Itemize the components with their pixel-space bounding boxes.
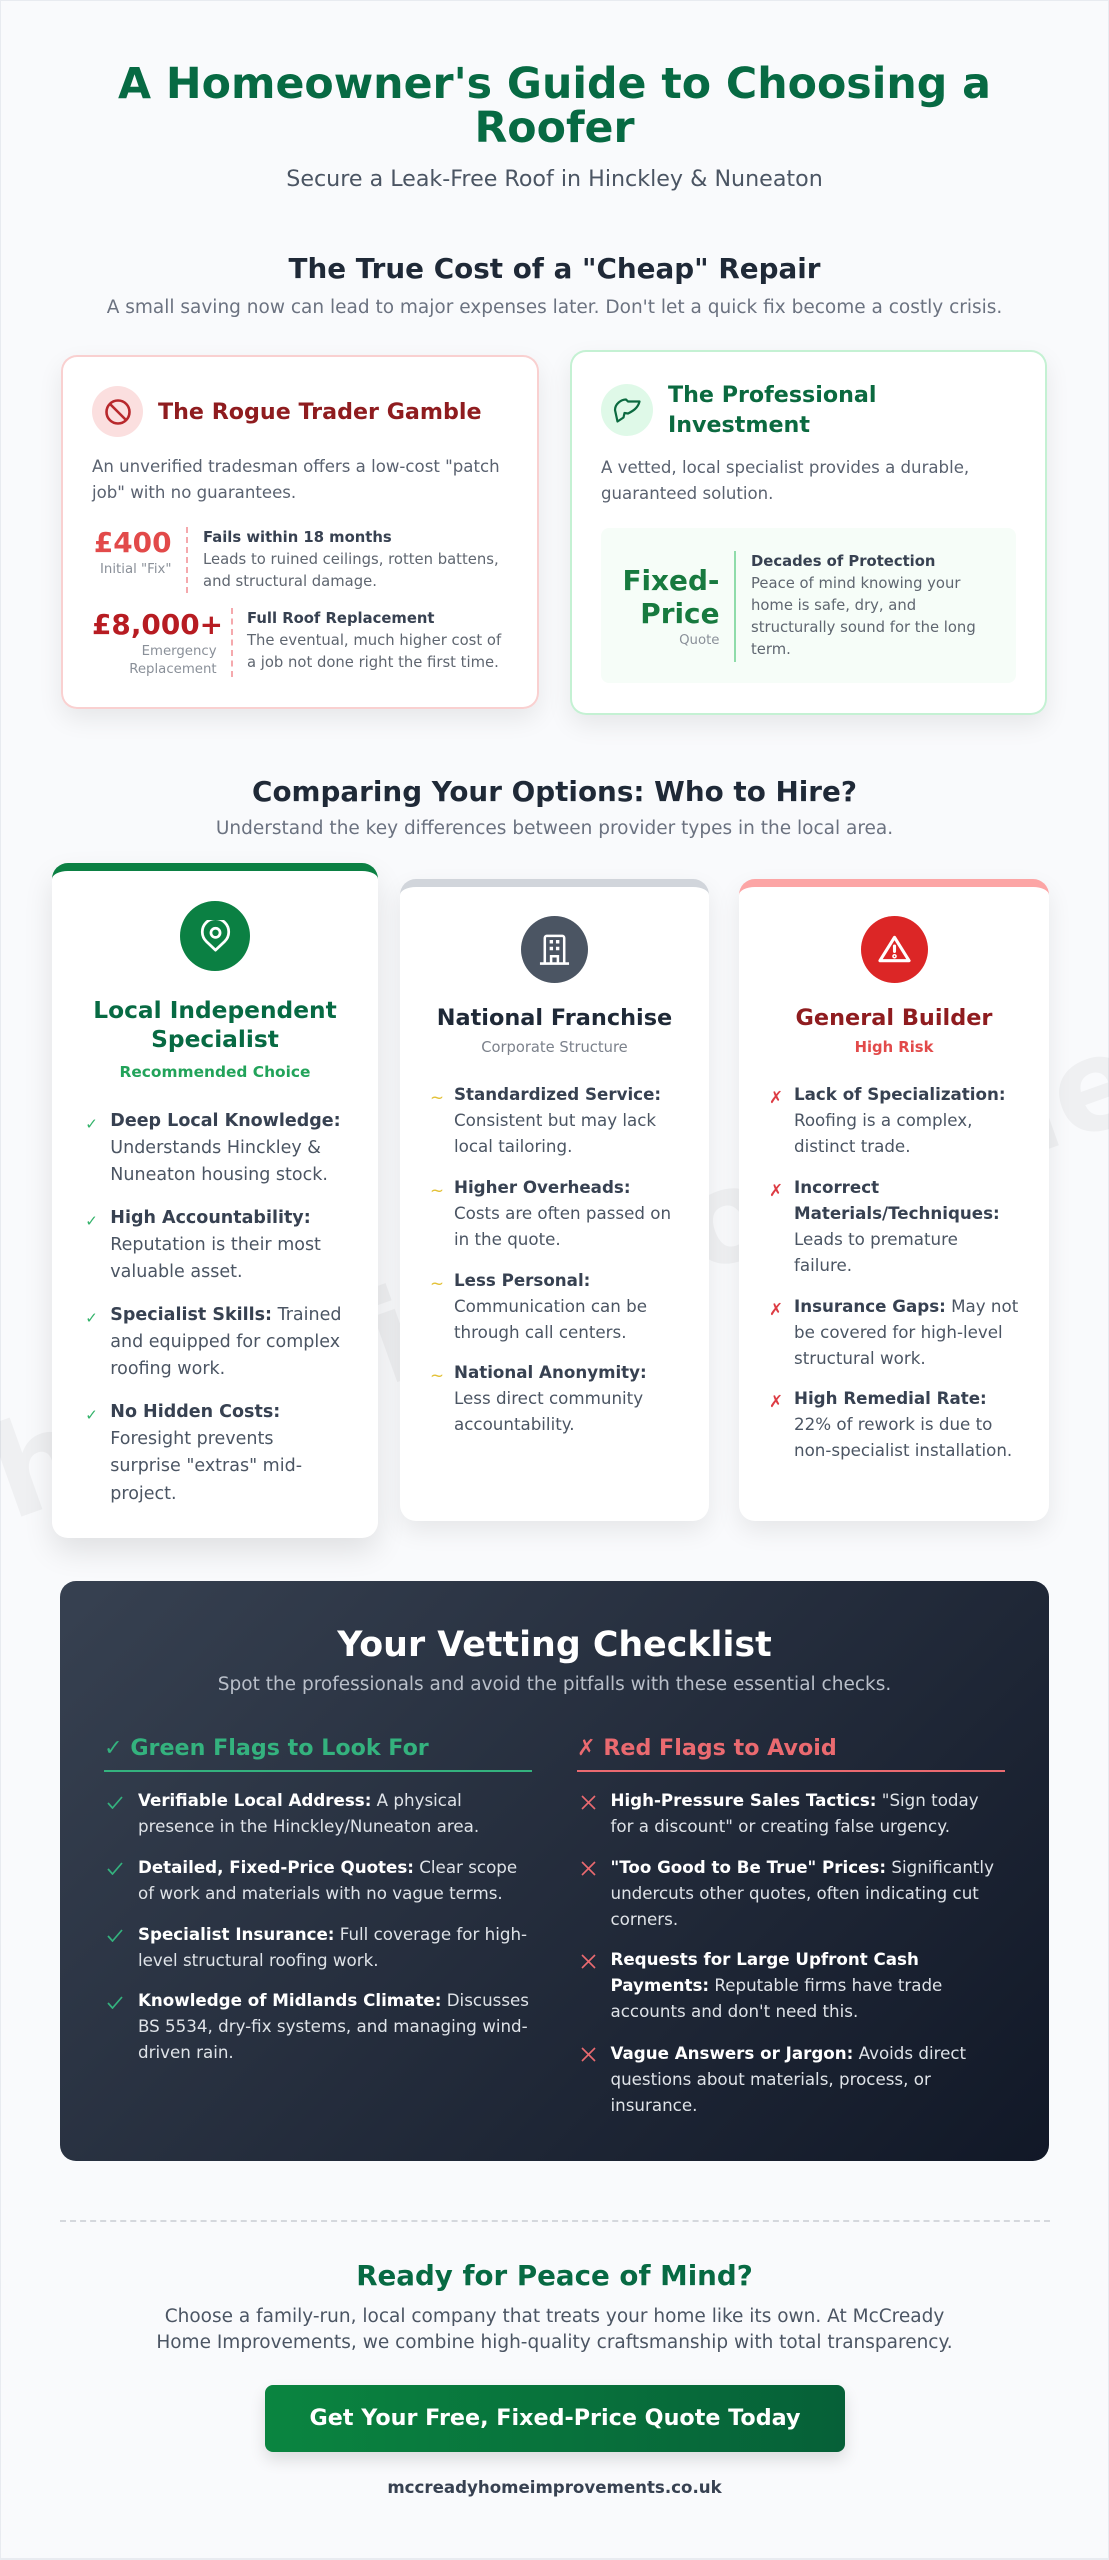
item: vague answers: Vague Answers or Jargon: Avoids direct (610, 2042, 966, 2062)
tag: recommended: Recommended Choice (120, 1062, 310, 1080)
item: specialist skills: Specialist Skills: Trained (110, 1305, 341, 1325)
item: insurance gaps: Insurance Gaps: May not (794, 1296, 1018, 1316)
item: specialist insurance: Specialist Insurance: Full coverage for high- (138, 1924, 527, 1944)
item: upfront cash: Requests for Large Upfront Cash (610, 1949, 919, 1969)
icon: warning (861, 916, 928, 982)
item: lack of specialization (769, 1084, 1006, 1156)
heading: local independent: Specialist (151, 1026, 279, 1052)
item: no hidden costs: surprise "extras" mid- (110, 1456, 302, 1476)
item: midlands climate: Knowledge of Midlands Climate: Discusses (138, 1990, 529, 2010)
heading: general builder: General Builder (796, 1005, 992, 1031)
item: verifiable address: Verifiable Local Address: A physical (138, 1790, 462, 1810)
item: upfront cash (582, 1949, 942, 2021)
panel: local independent: ✓ (85, 1212, 98, 1230)
title (118, 59, 991, 153)
item: no hidden costs: Foresight prevents (110, 1429, 274, 1449)
item: standardized service (430, 1084, 661, 1156)
item: midlands climate: driven rain. (138, 2042, 234, 2062)
underline: red flags (577, 1770, 1005, 1772)
item: less personal: through call centers. (454, 1322, 627, 1342)
explanation: decades: Peace of mind knowing your (751, 575, 960, 592)
item: too good prices: corners. (610, 1909, 678, 1929)
panel: local independent: ✓ (85, 1406, 98, 1424)
item: standardized service: Consistent but may lack (454, 1110, 656, 1130)
panel: national franchise: ~ (430, 1272, 444, 1292)
item: high accountability: valuable asset. (110, 1262, 243, 1282)
icon: leaf (601, 384, 653, 436)
item: higher overheads (430, 1177, 671, 1249)
item: less personal: Communication can be (454, 1296, 647, 1316)
stat label: emergency: Emergency (142, 644, 217, 658)
explanation: replacement: Full Roof Replacement (247, 610, 434, 627)
title: A Homeowner's Guide to Choosing a (118, 59, 991, 109)
item: national anonymity: Less direct community (454, 1388, 643, 1408)
item: incorrect materials: Incorrect (794, 1177, 879, 1197)
panel: national franchise (400, 879, 709, 1521)
item: high remedial rate: non-specialist installation. (794, 1440, 1012, 1460)
item: no hidden costs: project. (110, 1484, 177, 1504)
item: deep local knowledge: Deep Local Knowledge: (110, 1111, 341, 1131)
item: standardized service: Standardized Service: (454, 1084, 661, 1104)
item: lack of specialization: Lack of Specialization: (794, 1084, 1006, 1104)
call to action text: Choose a family-run, local company that treats your home like its own. At McCready (165, 2306, 944, 2327)
tag: high risk: High Risk (855, 1039, 933, 1056)
item: higher overheads: Higher Overheads: (454, 1177, 630, 1197)
explanation: decades (751, 553, 976, 658)
item: no hidden costs (85, 1402, 302, 1504)
explanation: replacement: a job not done right the first time. (247, 654, 499, 671)
stat: fixed price: Fixed- (622, 564, 720, 597)
button: Get Your Free, Fixed-Price Quote Today (310, 2405, 800, 2431)
stat label: initial fix: Initial "Fix" (100, 562, 172, 576)
explanation: decades: term. (751, 641, 791, 658)
item: specialist skills (85, 1305, 341, 1379)
heading: true cost: The True Cost of a "Cheap" Repair (288, 252, 820, 285)
item: higher overheads: in the quote. (454, 1229, 561, 1249)
description (601, 458, 969, 502)
item: high accountability: High Accountability: (110, 1208, 311, 1228)
item: incorrect materials: Leads to premature (794, 1229, 958, 1249)
item: high accountability: Reputation is their most (110, 1235, 321, 1255)
item: upfront cash: accounts and don't need this. (610, 2001, 858, 2021)
panel: general builder: ✗ (769, 1391, 783, 1411)
stat: fixed price: Price (640, 597, 720, 630)
underline: green flags (104, 1770, 532, 1772)
tag: corporate: Corporate Structure (481, 1039, 628, 1056)
item: standardized service: local tailoring. (454, 1136, 572, 1156)
item: upfront cash: Payments: Reputable firms have trade (610, 1975, 942, 1995)
item: vague answers: questions about materials, process, or (610, 2068, 931, 2088)
explanation: fails: and structural damage. (203, 573, 377, 590)
separator (734, 551, 736, 662)
description: An unverified tradesman offers a low-cost "patch (92, 456, 500, 476)
website: mccreadyhomeimprovements.co.uk (387, 2478, 722, 2496)
item: high pressure: for a discount" or creating false urgency. (610, 1816, 950, 1836)
panel: local independent: ✓ (85, 1309, 98, 1327)
item: high remedial rate: 22% of rework is due to (794, 1414, 992, 1434)
item: national anonymity (430, 1362, 647, 1434)
item: national anonymity: National Anonymity: (454, 1362, 647, 1382)
item: higher overheads: Costs are often passed on (454, 1203, 671, 1223)
item: verifiable address: presence in the Hinckley/Nuneaton area. (138, 1816, 479, 1836)
item: incorrect materials: failure. (794, 1255, 852, 1275)
item: less personal (430, 1270, 647, 1342)
heading: rogue trader: The Rogue Trader Gamble (158, 399, 482, 425)
stat label: emergency (129, 644, 217, 676)
separator (231, 608, 233, 677)
icon: pin (180, 901, 250, 971)
subtitle: Secure a Leak-Free Roof in Hinckley & Nuneaton (286, 166, 823, 192)
panel: general builder: ✗ (769, 1180, 783, 1200)
item: too good prices: undercuts other quotes, often indicating cut (610, 1883, 979, 1903)
explanation: replacement (246, 610, 502, 671)
description: A vetted, local specialist provides a durable, (601, 458, 969, 476)
description (92, 456, 500, 502)
item: incorrect materials (769, 1177, 1000, 1275)
description: job" with no guarantees. (92, 482, 296, 502)
icon: building (521, 916, 588, 982)
item: high pressure: High-Pressure Sales Tactics: "Sign today (610, 1790, 979, 1810)
panel: rogue trader (61, 355, 539, 709)
explanation: replacement: The eventual, much higher cost of (247, 632, 501, 649)
subheading: checklist: Spot the professionals and avoid the pitfalls with these essential checks. (218, 1674, 891, 1695)
item: specialist skills: roofing work. (110, 1359, 225, 1379)
heading: professional: Investment (668, 412, 810, 438)
item: specialist insurance (107, 1924, 527, 1970)
call to action text (156, 2306, 953, 2353)
panel: national franchise: ~ (430, 1180, 444, 1200)
heading: professional: The Professional (668, 382, 876, 408)
subheading: comparing: Understand the key differences between provider types in the local area. (216, 818, 893, 839)
heading: professional (668, 382, 876, 438)
item: no hidden costs: No Hidden Costs: (110, 1402, 280, 1422)
panel: vetting checklist (60, 1581, 1049, 2161)
call to action text: Home Improvements, we combine high-quality craftsmanship with total transparency. (156, 2332, 953, 2353)
heading: ready: Ready for Peace of Mind? (356, 2258, 753, 2292)
stat: 8000: £8,000+ (92, 608, 223, 641)
item: specialist skills: and equipped for complex (110, 1332, 340, 1352)
item: deep local knowledge: Understands Hinckley & (110, 1138, 321, 1158)
panel: national franchise: ~ (430, 1365, 444, 1385)
item: too good prices: "Too Good to Be True" Prices: Significantly (610, 1857, 994, 1877)
panel: professional investment (570, 350, 1047, 715)
item: lack of specialization: Roofing is a complex, (794, 1110, 972, 1130)
item: high remedial rate: High Remedial Rate: (794, 1388, 987, 1408)
item: insurance gaps: be covered for high-level (794, 1322, 1003, 1342)
item: vague answers: insurance. (610, 2094, 697, 2114)
stat label: emergency: Replacement (129, 662, 217, 676)
stat: 400: £400 (94, 526, 172, 559)
item: verifiable address (108, 1790, 479, 1836)
item: specialist insurance: level structural roofing work. (138, 1950, 379, 1970)
heading: green flags: ✓ Green Flags to Look For (104, 1735, 429, 1761)
button (265, 2385, 845, 2452)
explanation: decades: Decades of Protection (751, 553, 935, 570)
item: deep local knowledge (85, 1111, 341, 1185)
heading: national franchise: National Franchise (437, 1005, 672, 1031)
heading: comparing: Comparing Your Options: Who to Hire? (252, 775, 857, 808)
title: Roofer (474, 103, 635, 153)
item: lack of specialization: distinct trade. (794, 1136, 910, 1156)
heading: local independent: Local Independent (93, 996, 337, 1024)
item: insurance gaps: structural work. (794, 1348, 926, 1368)
stat: fixed price (622, 564, 720, 630)
explanation: decades: home is safe, dry, and (751, 597, 916, 614)
item: detailed quotes: Detailed, Fixed-Price Quotes: Clear scope (138, 1857, 517, 1877)
explanation: fails: Leads to ruined ceilings, rotten battens, (203, 551, 499, 568)
item: vague answers (582, 2042, 966, 2114)
item: less personal: Less Personal: (454, 1270, 590, 1290)
stat label: quote: Quote (679, 632, 720, 648)
panel: local independent (52, 863, 378, 1538)
explanation: fails (203, 529, 499, 590)
item: midlands climate (107, 1990, 529, 2062)
panel: national franchise: ~ (430, 1087, 444, 1107)
explanation: decades: structurally sound for the long (751, 619, 976, 636)
item: detailed quotes: of work and materials with no vague terms. (138, 1883, 503, 1903)
panel: general builder: ✗ (769, 1298, 783, 1318)
item: too good prices (582, 1857, 994, 1929)
item: high accountability (85, 1208, 321, 1282)
item: midlands climate: BS 5534, dry-fix systems, and managing wind- (138, 2016, 528, 2036)
subheading: true cost: A small saving now can lead to major expenses later. Don't let a quick fix become a costly crisis. (107, 297, 1002, 318)
heading: local independent (93, 996, 337, 1052)
panel: general builder (739, 879, 1049, 1521)
item: high pressure (582, 1790, 979, 1836)
item: incorrect materials: Materials/Techniques: (794, 1203, 1000, 1223)
item: deep local knowledge: Nuneaton housing stock. (110, 1165, 328, 1185)
item: national anonymity: accountability. (454, 1414, 575, 1434)
description: guaranteed solution. (601, 484, 773, 502)
callout: fixed price (601, 528, 1016, 683)
item: detailed quotes (107, 1857, 517, 1903)
separator (186, 527, 188, 593)
heading: red flags: ✗ Red Flags to Avoid (577, 1735, 837, 1761)
heading: checklist: Your Vetting Checklist (337, 1625, 772, 1665)
panel: general builder: ✗ (769, 1087, 783, 1107)
item: high remedial rate (769, 1388, 1012, 1460)
explanation: fails: Fails within 18 months (203, 529, 392, 546)
icon: ban (92, 386, 143, 437)
item: insurance gaps (769, 1296, 1018, 1368)
panel: local independent: ✓ (85, 1115, 98, 1133)
